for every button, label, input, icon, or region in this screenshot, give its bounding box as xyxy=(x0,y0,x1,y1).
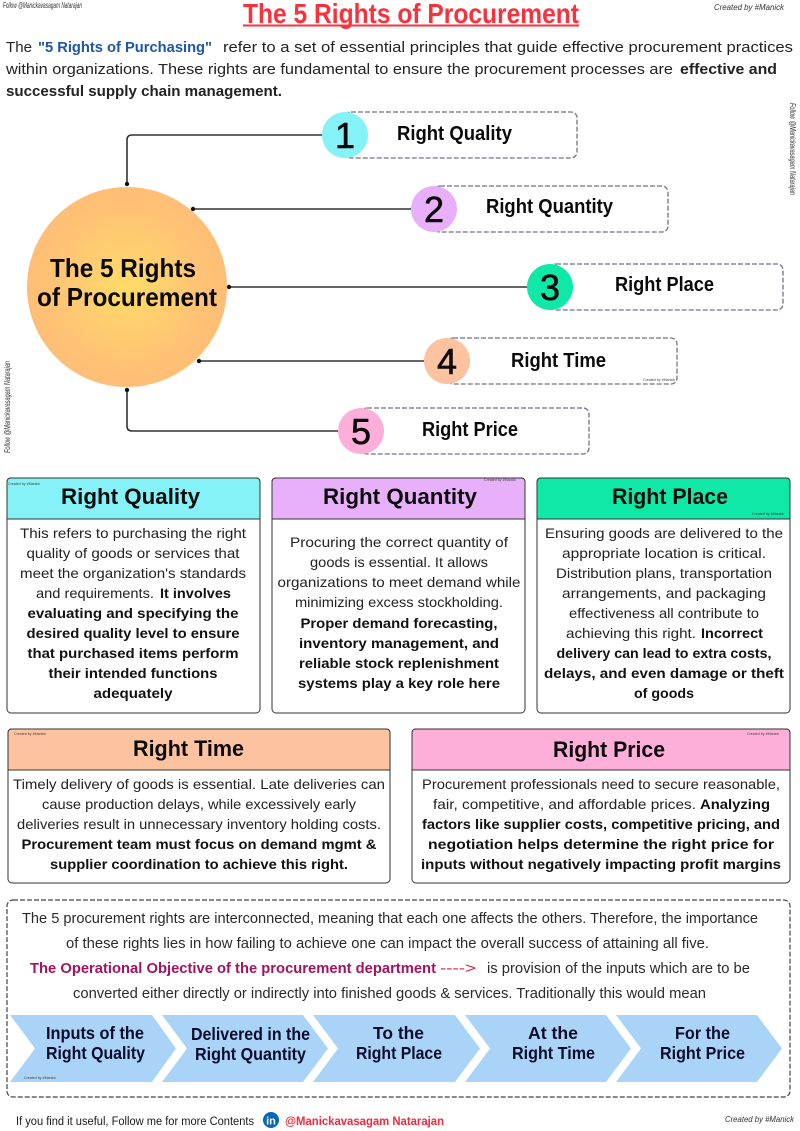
chevron 5: For the xyxy=(675,1023,730,1043)
panel: right place: Ensuring goods are delivered to the xyxy=(545,525,783,541)
node 1: right quality: Right Quality xyxy=(397,123,513,145)
node 5: right price xyxy=(338,408,589,454)
panel: right price: fair, competitive, and affordable prices. xyxy=(433,796,696,812)
panel: right time: cause production delays, while excessively early xyxy=(42,796,356,812)
footer call to action: If you find it useful, Follow me for more Contents xyxy=(16,1116,254,1128)
node 4: right time: Right Time xyxy=(511,350,606,372)
chevron 5: Right Price xyxy=(660,1043,745,1063)
panel: right quantity: Right Quantity xyxy=(323,484,478,509)
chevron 1: Right Quality xyxy=(46,1043,145,1063)
intro paragraph xyxy=(5,39,793,100)
intro paragraph: successful supply chain management. xyxy=(6,83,282,100)
intro paragraph: within organizations. These rights are fundamental to ensure the procurement processes are xyxy=(5,61,673,78)
watermark: left vertical: Follow @Manickavasagam Natarajan xyxy=(3,361,12,453)
chevron 2 xyxy=(162,1015,328,1082)
panel: right time: Created by #Manick xyxy=(14,732,46,736)
node 2: right quantity: Right Quantity xyxy=(486,196,614,218)
panel: interconnected summary: is provision of the inputs which are to be xyxy=(487,961,750,977)
panel: right price: factors like supplier costs, competitive pricing, and xyxy=(422,816,780,832)
panel: right quality: adequately xyxy=(94,685,173,701)
intro paragraph: effective and xyxy=(680,61,777,78)
panel: right quantity: Procuring the correct quantity of xyxy=(290,534,508,550)
panel: right time xyxy=(8,729,390,883)
panel: right place: delivery can lead to extra costs, xyxy=(556,645,772,661)
panel: right quantity: systems play a key role here xyxy=(298,675,500,691)
panel: right quantity xyxy=(272,478,525,713)
panel: right place: of goods xyxy=(634,685,694,701)
watermark: bottom right: Created by #Manick xyxy=(725,1115,795,1124)
panel: right quality xyxy=(7,478,260,713)
panel: right quality: It involves xyxy=(160,585,231,601)
intro paragraph: refer to a set of essential principles that guide effective procurement practices xyxy=(223,39,793,56)
panel: right place: achieving this right. xyxy=(566,625,696,641)
panel: right time: Timely delivery of goods is essential. Late deliveries can xyxy=(13,776,385,792)
panel: right time: supplier coordination to achieve this right. xyxy=(50,856,348,872)
panel: right price: inputs without negatively impacting profit margins xyxy=(421,856,781,872)
node 4: right time xyxy=(424,338,677,384)
intro paragraph: The xyxy=(6,39,32,56)
chevron 4: Right Time xyxy=(512,1043,595,1063)
panel: right quality: desired quality level to ensure xyxy=(26,625,240,641)
footer handle: @Manickavasagam Natarajan xyxy=(285,1114,444,1128)
panel: right quality: quality of goods or services that xyxy=(26,545,240,561)
panel: interconnected summary: The 5 procurement rights are interconnected, meaning that each one affects the others. Therefore, the importance xyxy=(22,911,758,927)
watermark: top left: Follow @Manickavasagam Natarajan xyxy=(3,1,82,10)
chevron 3: Right Place xyxy=(356,1043,442,1063)
node 3: right place: Right Place xyxy=(615,274,714,296)
central circle: The 5 Rights xyxy=(50,253,196,283)
node 2: right quantity: 2 xyxy=(424,189,444,230)
icon: linkedin xyxy=(263,1112,279,1128)
panel: right quality: evaluating and specifying the xyxy=(28,605,239,621)
icon: linkedin: in xyxy=(266,1116,276,1128)
watermark: right vertical: Follow @Manickavasagam Natarajan xyxy=(788,103,797,195)
panel: right place: arrangements, and packaging xyxy=(562,585,766,601)
chevron 1: Inputs of the xyxy=(46,1023,144,1043)
intro paragraph: "5 Rights of Purchasing" xyxy=(38,39,212,56)
panel: right price: negotiation helps determine the right price for xyxy=(428,836,775,852)
panel: right quantity: inventory management, and xyxy=(299,635,499,651)
node 5: right price: Right Price xyxy=(422,419,518,441)
panel: right price: Right Price xyxy=(553,737,665,762)
chevron 3 xyxy=(313,1015,480,1082)
panel: right quality: This refers to purchasing the right xyxy=(20,525,246,541)
node 5: right price: 5 xyxy=(351,411,371,452)
panel: right quantity: goods is essential. It allows xyxy=(310,554,488,570)
panel: interconnected summary: The Operational Objective of the procurement department xyxy=(30,961,436,977)
connectors xyxy=(125,135,527,431)
central circle xyxy=(27,187,227,387)
watermark: top right: Created by #Manick xyxy=(714,3,785,12)
panel: right quality: Right Quality xyxy=(61,484,201,509)
chevron 4 xyxy=(465,1015,631,1082)
panel: right price: Created by #Manick xyxy=(747,732,779,736)
panel: right price: Procurement professionals need to secure reasonable, xyxy=(422,776,780,792)
panel: right time: deliveries result in unnecessary inventory holding costs. xyxy=(17,816,381,832)
panel: right quality: and requirements. xyxy=(36,585,154,601)
node 3: right place: 3 xyxy=(540,267,560,308)
panel: right time: Procurement team must focus on demand mgmt & xyxy=(22,836,376,852)
node 4: right time: 4 xyxy=(437,341,457,382)
panel: right quality: that purchased items perform xyxy=(28,645,238,661)
central circle: of Procurement xyxy=(37,282,217,312)
panel: right quantity: reliable stock replenishment xyxy=(299,655,499,671)
panel: right quantity: minimizing excess stockholding. xyxy=(295,594,503,610)
chevron 4: At the xyxy=(528,1023,578,1043)
panel: right place: Right Place xyxy=(612,484,728,509)
node 2: right quantity xyxy=(411,186,668,232)
chevron 3: To the xyxy=(373,1023,424,1043)
chevron 2: Right Quantity xyxy=(195,1044,306,1064)
panel: right place: Distribution plans, transportation xyxy=(556,565,772,581)
panel: right quantity: Created by #Manick xyxy=(484,478,516,482)
panel: right quantity: organizations to meet demand while xyxy=(278,574,521,590)
node 4: right time: Created by #Manick xyxy=(643,378,675,382)
node 1: right quality: 1 xyxy=(335,115,355,156)
panel: right price: Analyzing xyxy=(700,796,770,812)
panel: interconnected summary: of these rights lies in how failing to achieve one can impact the overall success of attaining all five. xyxy=(66,936,709,952)
panel: interconnected summary: ----> xyxy=(440,961,476,977)
panel: right quality: Created by #Manick xyxy=(8,482,40,486)
chevron 5 xyxy=(616,1015,782,1082)
panel: right place xyxy=(537,478,790,713)
panel: right place: Incorrect xyxy=(701,625,763,641)
panel: right place: delays, and even damage or theft xyxy=(544,665,784,681)
panel: interconnected summary xyxy=(7,900,790,1097)
panel: right place: Created by #Manick xyxy=(752,512,784,516)
node 1: right quality xyxy=(322,112,577,158)
panel: right price xyxy=(412,729,790,883)
chevron 1: Created by #Manick xyxy=(24,1076,56,1080)
panel: interconnected summary: converted either directly or indirectly into finished goods & services. Traditionally this would mean xyxy=(73,986,706,1002)
panel: right place: appropriate location is critical. xyxy=(562,545,766,561)
panel: right quality: their intended functions xyxy=(48,665,218,681)
node 3: right place xyxy=(527,264,783,310)
chevron 2: Delivered in the xyxy=(191,1024,310,1044)
panel: right place: effectiveness all contribute to xyxy=(569,605,759,621)
chevron 1 xyxy=(10,1015,176,1082)
panel: right quantity: Proper demand forecasting, xyxy=(300,615,498,631)
panel: right time: Right Time xyxy=(133,736,244,761)
panel: right quality: meet the organization's standards xyxy=(20,565,246,581)
